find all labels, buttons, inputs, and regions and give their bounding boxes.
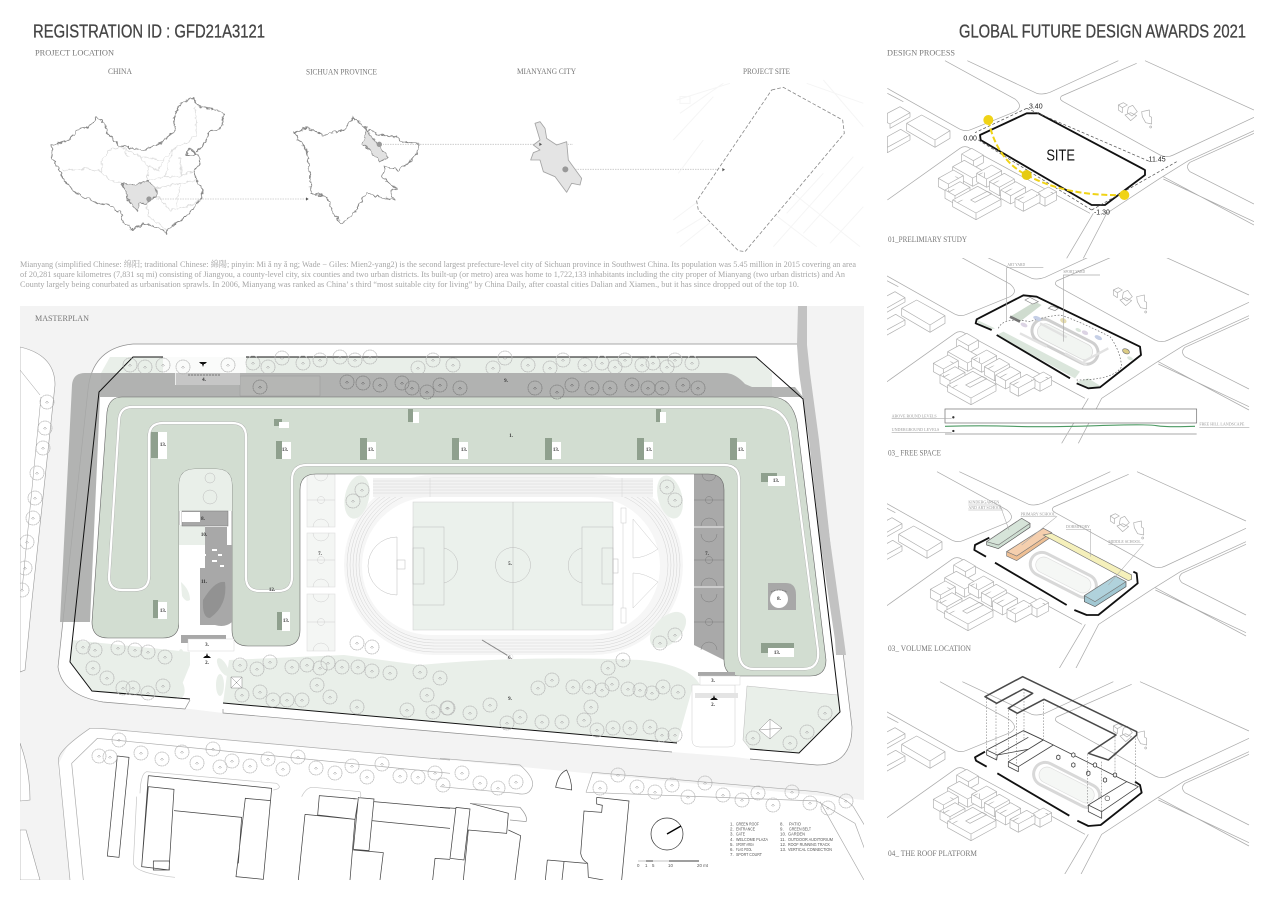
scale bar: 5 [652,863,655,868]
plan number labels: 11. [201,580,208,585]
plan number labels: 13. [774,651,781,656]
scale bar: 1 [645,863,648,868]
legend: GREEN BELT [789,827,811,832]
plan number labels: 2. [205,661,210,666]
green roof [92,397,826,676]
legend: 3. [730,832,734,837]
plan number labels: 13. [553,448,560,453]
diagram: 03 volume location: AND ART SCHOOL [968,505,1003,510]
diagram: 03 volume location [879,472,1246,669]
chart: level section strip: ABOVE ROUND LEVELS [892,414,937,418]
site white ground [58,344,852,765]
heading: masterplan: MASTERPLAN [35,314,89,323]
diagram: 01 preliminary study: 3.40 [1029,103,1043,110]
plan number labels: 13. [738,448,745,453]
plan number labels: 4. [202,378,207,383]
scale bar: 10 [668,863,673,868]
legend: 12. [780,842,786,847]
legend: ROOF RUNNING TRACK [788,842,830,847]
heading: project location: PROJECT LOCATION [35,48,114,58]
plan number labels: 13. [160,443,167,448]
diagram: 01 preliminary study: -1.30 [1094,209,1110,216]
sport courts east [694,474,724,660]
south white block [58,728,864,880]
text block: about mianyang: Mianyang (simplified Chinese: 绵阳; traditional Chinese: 綿陽; pinyin: Mi ǎ ny ǎ ng; Wade − Giles: Mien2-yang2) is the second largest prefecture-level city of Sichuan province in Southwest China. Its population was 5.45 million in 2015 covering an area [20,258,856,269]
green belt south [70,640,700,743]
legend: 10. [780,832,786,837]
north arrow [651,818,683,850]
label: sichuan province: SICHUAN PROVINCE [306,68,377,76]
caption: 04 the roof platform: 04_ THE ROOF PLATFORM [888,849,977,858]
plan number labels: 9. [504,379,509,384]
south road edge lines [58,728,450,880]
diagram: 03 free space: ART YARD [1007,263,1025,267]
vertical connection volumes [151,409,794,657]
diagram: 03 free space: SPORT YARD [1063,270,1086,274]
roof running track [109,407,818,669]
garden slot [179,469,232,633]
plan number labels: 10. [201,533,208,538]
legend [730,822,833,857]
legend: GREEN ROOF [736,822,759,826]
heading: design process: DESIGN PROCESS [887,48,955,58]
legend: 13. [780,847,786,852]
diagram: 01 preliminary study [887,61,1254,258]
label: mianyang city: MIANYANG CITY [517,67,576,76]
plan number labels: 13. [773,479,780,484]
legend: VERTICAL CONNECTION [788,847,832,852]
legend: 2. [730,827,734,832]
trees [15,350,853,815]
diagram: 03 volume location: MIDDLE SCHOOL [1108,539,1141,544]
scale bar: 20 mt [697,863,709,868]
map: sichuan province [294,117,573,224]
caption: 03 volume location: 03_ VOLUME LOCATION [888,644,971,653]
legend: 5. [730,842,734,847]
site boundary black [70,357,840,753]
text block: about mianyang: County largely being conurbated as urbanisation sprawls. In 2006, Mianyang was ranked as China’ s third “most suitable city for living” by China Daily, after coastal cities Dalian and Xiamen., but it has since dropped out of the top 10. [20,279,799,289]
legend: OUTDOOR AUDITORIUM [788,837,833,842]
plan number labels: 9. [508,697,513,702]
map: mianyang city [531,122,722,192]
caption: 03 free space: 03_ FREE SPACE [888,448,941,458]
legend: 6. [730,847,734,852]
plan number labels: 8. [201,517,206,522]
legend: 7. [730,852,734,857]
north plaza [163,357,246,385]
plan number labels: 13. [160,609,167,614]
legend: 4. [730,837,734,842]
plan number labels: 13. [283,619,290,624]
plan number labels: 2. [711,703,716,708]
patio east [768,583,796,610]
legend: GATE [736,832,745,837]
text block: about mianyang: of 20,281 square kilometres (7,831 sq mi) consisting of Jiangyou, a county-level city, six counties and two urban districts. Its built-up (or metro) area was home to 1,722,133 inhabitants including the city proper of Mianyang (two urban districts) and An [20,269,846,279]
plan number labels: 13. [646,448,653,453]
panel: masterplan [15,306,864,880]
diagram: 03 volume location: PRIMARY SCHOOL [1021,512,1056,517]
diagram: 03 free space [882,246,1249,443]
label: project site: PROJECT SITE [743,67,790,76]
legend: SPORT AREA [736,842,754,847]
caption: 01 preliminary study: 01_PRELIMIARY STUDY [888,235,967,244]
plan number labels: 8. [777,597,782,602]
legend: GARDEN [788,832,805,837]
left neighbouring block [20,347,55,672]
legend: WELCOME PLAZA [736,837,768,842]
plan number labels: 12. [269,588,276,593]
green belt north [101,357,772,387]
plan number labels [160,378,782,708]
plan number labels: 13. [282,448,289,453]
legend: 9. [780,827,784,832]
legend: 1. [730,822,734,826]
right road strip [797,306,846,655]
plan number labels: 7. [705,552,710,557]
plan number labels: 1. [509,434,514,439]
diagram: 01 preliminary study: SITE [1046,148,1075,165]
map: china [52,97,309,233]
chart: level section strip: FREE HILL LANDSCAPE [1199,423,1245,427]
scale bar [637,861,709,868]
plan number labels: 7. [318,552,323,557]
entrances and gates [169,362,782,747]
chart: level section strip [892,409,1249,434]
plan number labels: 13. [461,448,468,453]
legend: 11. [780,837,786,842]
plan number labels: 6. [508,656,513,661]
legend: SPORT COURT [736,852,762,857]
plan number labels: 3. [205,643,210,648]
label: china: CHINA [108,67,132,76]
sport courts west [306,474,336,652]
shadow band north and west [60,373,803,622]
diagram: 03 volume location: KINDERGARTEN [968,500,999,505]
diagram: 01 preliminary study: 0.00 [963,136,977,143]
diagram: 04 the roof platform [882,677,1249,879]
diagram: 03 volume location: DORMITORY [1066,524,1090,529]
diagram: 01 preliminary study: 11.45 [1149,157,1166,164]
chart: level section strip: UNDERGROUND LEVELS [892,428,939,432]
map: project site [673,80,863,252]
plan number labels: 3. [711,679,716,684]
legend: ENTRANCE [736,827,755,832]
plan number labels: 13. [368,448,375,453]
plan number labels: 5. [508,562,513,567]
legend: PATIO [789,822,802,826]
title: registration id: REGISTRATION ID : GFD21A3121 [33,20,265,42]
legend: 8. [780,822,784,826]
stadium and running track [344,475,683,660]
text block: about mianyang [20,258,856,289]
legend: FLAG POOL [736,847,752,852]
scale bar: 0 [637,863,640,868]
